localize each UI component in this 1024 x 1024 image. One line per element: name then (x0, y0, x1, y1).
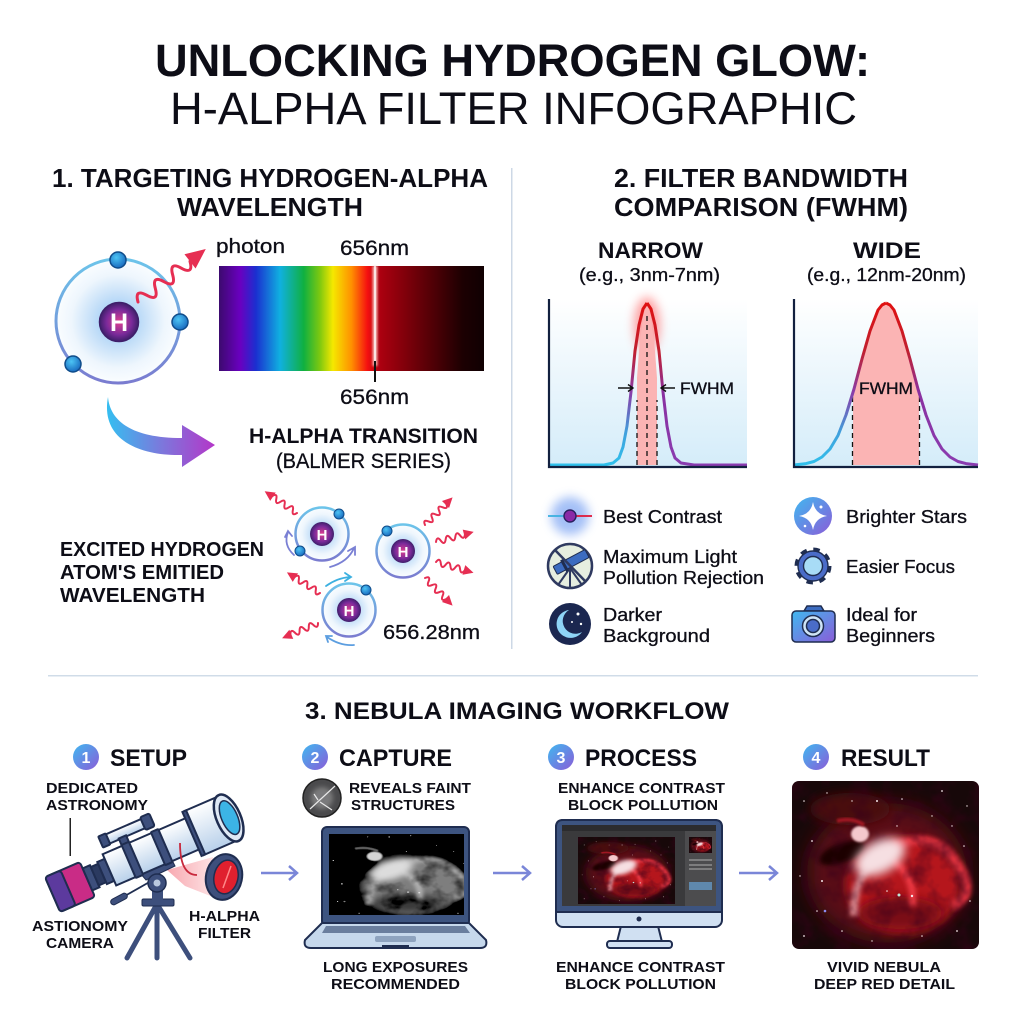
label: astionomy camera (32, 918, 128, 952)
panel: nebula imaging workflow (32, 698, 979, 993)
icon: monitor with processing software (556, 820, 722, 948)
step 3 header: process: PROCESS (585, 745, 697, 772)
chart: narrow filter curve (549, 297, 747, 467)
label: astionomy camera: CAMERA (46, 935, 114, 952)
text: h-alpha transition: H-ALPHA TRANSITION (249, 425, 478, 448)
text: enhance contrast bottom: ENHANCE CONTRAST (556, 959, 725, 976)
legend: ideal for beginners: Ideal for (846, 605, 917, 625)
text: long exposures recommended (323, 959, 468, 993)
title (155, 35, 870, 134)
text: enhance contrast top: ENHANCE CONTRAST (558, 780, 725, 797)
label: h-alpha filter: FILTER (198, 925, 251, 942)
text: enhance contrast bottom: BLOCK POLLUTION (565, 976, 716, 993)
legend: darker background (549, 603, 710, 646)
text: long exposures recommended: LONG EXPOSURES (323, 959, 468, 976)
heading: section 1 (52, 163, 488, 222)
title: UNLOCKING HYDROGEN GLOW: (155, 35, 870, 86)
chart: narrow filter curve: FWHM (680, 380, 734, 398)
step 1 header: setup: SETUP (110, 745, 187, 772)
label: dedicated astronomy: ASTRONOMY (46, 797, 148, 814)
text: enhance contrast top (558, 780, 725, 814)
legend: maximum light pollution rejection: Maximum Light (603, 547, 737, 567)
chart: wide filter curve (794, 299, 978, 467)
text: reveals faint structures (349, 780, 471, 814)
text: long exposures recommended: RECOMMENDED (331, 976, 460, 993)
text: excited hydrogen: ATOM'S EMITIED (60, 562, 224, 584)
label: h-alpha filter: H-ALPHA (189, 908, 260, 925)
step 1 header: setup: 1 (82, 750, 91, 767)
legend: brighter stars (794, 497, 967, 535)
icon: laptop with grayscale nebula (305, 825, 486, 948)
icon: telescope with camera and filter (38, 780, 250, 958)
label: dedicated astronomy (46, 780, 148, 856)
icon: hydrogen atom emitting photon: H (110, 309, 128, 337)
panel: targeting hydrogen-alpha wavelength (52, 163, 488, 645)
label: 656.28nm: 656.28nm (383, 622, 480, 644)
step 4 header: result: RESULT (841, 745, 930, 772)
label: photon: photon (216, 236, 285, 258)
legend: easier focus (798, 550, 955, 582)
diagram: excited atoms emitting photons: H (344, 603, 354, 620)
legend: darker background: Background (603, 626, 710, 646)
heading: narrow: (e.g., 3nm-7nm) (579, 265, 720, 285)
step 2 header: capture: CAPTURE (339, 745, 452, 772)
heading: wide (807, 238, 966, 285)
arrow: curved gradient arrow (107, 397, 215, 467)
heading: narrow (579, 238, 720, 285)
spectrum bar (219, 266, 484, 382)
text: vivid nebula deep red detail: VIVID NEBULA (827, 959, 941, 976)
heading: wide: WIDE (853, 238, 921, 263)
title: H-ALPHA FILTER INFOGRAPHIC (170, 83, 857, 134)
diagram: excited atoms emitting photons: H (398, 544, 408, 561)
text: h-alpha transition (249, 425, 478, 473)
icon: faint structures (303, 779, 341, 817)
arrow: capture to process (493, 866, 530, 880)
label: 656nm bottom: 656nm (340, 386, 409, 409)
label: 656nm top: 656nm (340, 237, 409, 260)
text: vivid nebula deep red detail: DEEP RED DETAIL (814, 976, 955, 993)
arrow: setup to capture (261, 866, 297, 880)
diagram: excited atoms emitting photons: H (317, 527, 327, 544)
text: excited hydrogen (60, 539, 264, 607)
panel: filter bandwidth comparison (548, 163, 978, 646)
text: excited hydrogen: EXCITED HYDROGEN (60, 539, 264, 561)
arrow: process to result (739, 866, 777, 880)
heading: section 3: 3. NEBULA IMAGING WORKFLOW (305, 698, 730, 725)
legend: ideal for beginners (792, 605, 935, 646)
label: h-alpha filter (189, 908, 260, 942)
text: reveals faint structures: STRUCTURES (351, 797, 455, 814)
legend: maximum light pollution rejection: Pollution Rejection (603, 568, 764, 588)
step 3 header: process: 3 (557, 750, 566, 767)
legend: maximum light pollution rejection (548, 544, 764, 588)
text: enhance contrast top: BLOCK POLLUTION (568, 797, 718, 814)
heading: narrow: NARROW (598, 238, 703, 263)
legend: darker background: Darker (603, 605, 662, 625)
heading: section 2: COMPARISON (FWHM) (614, 192, 908, 222)
legend: ideal for beginners: Beginners (846, 626, 935, 646)
icon: hydrogen atom emitting photon (56, 242, 211, 383)
heading: wide: (e.g., 12nm-20nm) (807, 265, 966, 285)
text: excited hydrogen: WAVELENGTH (60, 585, 205, 607)
text: reveals faint structures: REVEALS FAINT (349, 780, 471, 797)
text: vivid nebula deep red detail (814, 959, 955, 993)
legend: best contrast: Best Contrast (603, 507, 722, 527)
heading: section 1: WAVELENGTH (177, 192, 363, 222)
heading: section 2: 2. FILTER BANDWIDTH (614, 163, 908, 193)
step 4 header: result (803, 744, 930, 772)
text: h-alpha transition: (BALMER SERIES) (276, 450, 451, 473)
heading: section 2 (614, 163, 908, 222)
legend: easier focus: Easier Focus (846, 557, 955, 577)
label: dedicated astronomy: DEDICATED (46, 780, 138, 797)
step 2 header: capture: 2 (311, 750, 320, 767)
legend: best contrast (548, 497, 722, 535)
chart: wide filter curve: FWHM (859, 380, 913, 398)
image: vivid red nebula (792, 781, 979, 949)
step 4 header: result: 4 (812, 750, 821, 767)
legend: brighter stars: Brighter Stars (846, 507, 967, 527)
text: enhance contrast bottom (556, 959, 725, 993)
heading: section 1: 1. TARGETING HYDROGEN-ALPHA (52, 163, 488, 193)
label: astionomy camera: ASTIONOMY (32, 918, 128, 935)
step 1 header: setup (73, 744, 187, 772)
diagram: excited atoms emitting photons (262, 487, 475, 645)
